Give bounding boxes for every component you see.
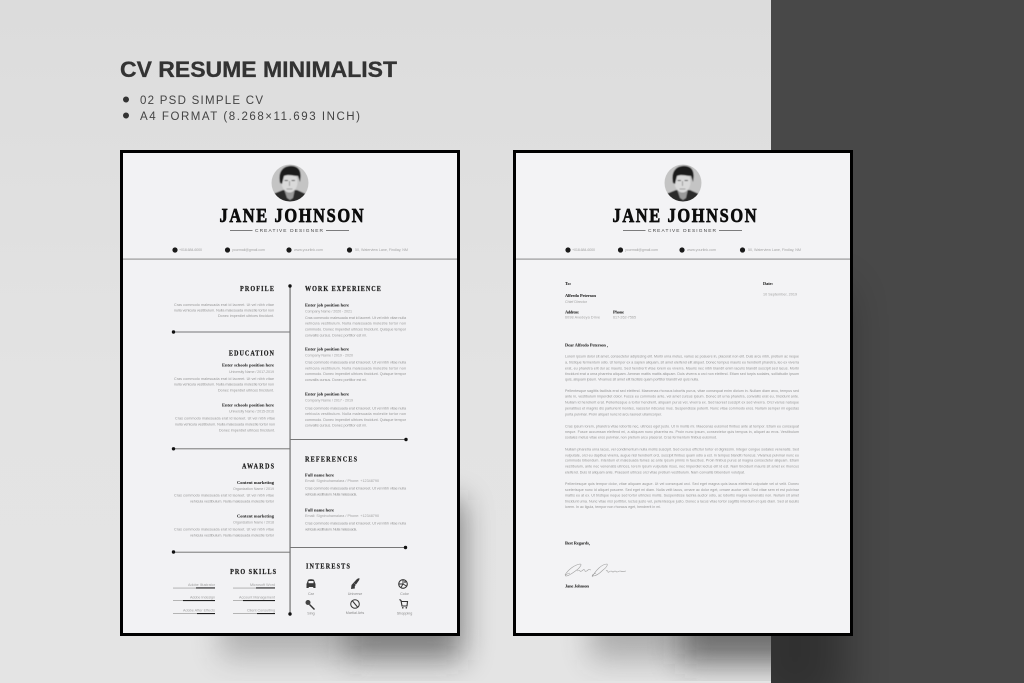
section: education: University Name / 2015-2016 [229, 410, 274, 414]
section: awards: Organization Name / 2019 [233, 487, 274, 491]
section: work experience: Enter job position here [305, 302, 349, 308]
letter body: Nullam pharetra urna lacus, vel condimentum nulla mollis suscipit. Sed cursus efficitur tortor et dignissim. Integer congue sodales venenatis. Sed [565, 448, 799, 452]
recipient block: Phone [613, 310, 624, 314]
letter body: eleifend. Duis id aliquam ante. Praesent ultrices orci vitae pretium vestibulum. Nam convallis bibendum volutpat. [565, 470, 745, 474]
letter body: Nullam id hendrerit erat. Pellentesque a tortor hendrerit, aliquam purus vel, viverra ex. Sed laoreet suscipit ex sed viverra. Orci varius natoque [565, 400, 799, 404]
section: interests [306, 563, 412, 615]
contact row [565, 247, 801, 253]
section: education: Cras commodo malesuada erat id laoreet. Ut vel nibh vitae [174, 377, 274, 381]
section: education: Donec imperdiet ultrices tincidunt. [218, 388, 274, 392]
letter body: vestibulum, ante nec venenatis ultrices, lorem ipsum vulputate risus, nec imperdiet lectus elit id est. Nam tincidunt mauris sit amet ex rhoncus [565, 464, 799, 468]
letter body: ante in, vestibulum imperdiet dolor. Fusce eu commodo ante, vel amet cursus ipsum. Donec sit urna pharetra, convallis erat eu, tincidunt ante. [565, 394, 799, 398]
title: CV RESUME MINIMALIST [120, 57, 398, 82]
letter body: erat, eu pharetra elit dui ac mauris. Sed hendrerit vitae lorem eu viverra. Mauris nec nibh blandit enim iaculis blandit suscipit sed lacus. Morbi [565, 366, 799, 370]
letter body: vulputate, orci eu dapibus viverra, augue nisl hendrerit orci, suscipit finibus quam odio a est. In tempus blandit rhoncus. Vivamus pulvinar nunc eu [565, 454, 799, 458]
section: references: Full name here [305, 508, 334, 512]
salutation: Dear Alfredo Peterson , [565, 342, 608, 348]
contact row [172, 247, 408, 253]
contact row: www.yourlink.com [294, 248, 323, 252]
section: pro skills: Microsoft Word [250, 583, 275, 587]
section: work experience [305, 286, 407, 428]
section: education: Enter schools position here [222, 402, 274, 408]
section: work experience: Enter job position here [305, 346, 349, 352]
section: education: Enter schools position here [222, 362, 274, 368]
section: pro skills [173, 569, 276, 614]
section: profile [174, 286, 274, 318]
timeline [172, 284, 408, 616]
bullet list: A4 FORMAT (8.268×11.693 INCH) [140, 111, 360, 123]
recipient block: Address: [565, 310, 580, 314]
letter body [565, 354, 800, 509]
section: awards: AWARDS [242, 463, 274, 471]
signature [565, 564, 626, 577]
section: references: REFERENCES [305, 456, 357, 464]
recipient block: 617-262-7565 [613, 316, 636, 320]
letter body: commodo bibendum. Interdum et malesuada fames ac ante ipsum primis in faucibus. Proin finibus purus at magna consectetur aliquam. Etiam [565, 458, 799, 462]
section: work experience: Cras commodo malesuada erat id laoreet. Ut vel nibh vitae nulla [305, 406, 407, 410]
letter body: Lorem ipsum dolor sit amet, consectetur adipiscing elit. Morbi urna metus, varius ac posuere in, placerat non elit. Duis arcu nibh, pretium ac neque [565, 354, 799, 358]
page shadows on light area [220, 500, 810, 664]
name: JANE JOHNSON [220, 205, 364, 226]
letter body: porta pulvinar. Proin aliquet nunc id arcu laoreet ullamcorper. [565, 412, 662, 416]
section: references: vehicula vestibulum. Nulla malesuada. [305, 492, 357, 496]
subtitle [230, 228, 349, 234]
section: education: EDUCATION [229, 350, 274, 358]
section: awards [174, 463, 275, 538]
icon: martial arts: Martial Arts [346, 611, 364, 615]
bullet list [123, 95, 360, 123]
photo [664, 164, 702, 203]
section: references: Email: Signinuhamalara / Phone: +12348790 [305, 514, 379, 518]
date block: 10 September, 2019 [763, 292, 797, 296]
letter body: scelerisque nunc id aliquet posuere. Sed eget mi diam. Nulla velit lacus, ornare ac dolor eget, ornare auctor velit. Sed vitae sem et est pulvinar [565, 488, 800, 492]
letter body: neque. Fusce accumsan eleifend mi, a aliquam nunc pharetra eu. Proin nunc ipsum, consectetur quis tempus in, aliquet ac eros. Vestibulum [565, 430, 799, 434]
section: pro skills: PRO SKILLS [230, 569, 276, 576]
letter body: quis, aliquam ipsum. Vivamus sit amet elit facilisis quam porttitor blandit vel quis nulla. [565, 378, 699, 382]
section: awards: Content marketing [237, 514, 275, 518]
section: education [174, 350, 275, 432]
contact row: 50, Waterview Lane, Findlay, NM [355, 248, 408, 252]
section: education: nulla vehicula vestibulum. Nulla malesuada molestie tortor non [174, 382, 274, 386]
section: education: nulla vehicula vestibulum. Nulla malesuada molestie tortor non [175, 422, 275, 426]
section: references: Full name here [305, 472, 334, 478]
section: profile: PROFILE [240, 286, 274, 293]
section: work experience: vehicula vestibulum. Nulla malesuada molestie tortor non [305, 322, 406, 326]
section: work experience: commodo. Donec imperdiet ultrices tincidunt. Quisque tempor [305, 418, 407, 422]
section: work experience: convallis cursus. Donec porttitor est mi. [305, 334, 367, 338]
section: work experience: convallis cursus. Donec porttitor est mi. [305, 378, 367, 382]
contact row: www.yourlink.com [687, 248, 716, 252]
section: references: Cras commodo malesuada erat id laoreet. Ut vel nibh vitae nulla [305, 486, 407, 490]
section: awards: Content marketing [237, 480, 275, 485]
section: references [305, 456, 407, 532]
letter body: sodales metus vitae eros pulvinar, non pretium arcu placerat. Cras fermentum finibus euismod. [565, 436, 717, 440]
letter body: Pellentesque sagittis facilisis erat sed eleifend. Maecenas rhoncus lobortis purus, vitae consequat enim dictum in. Nullam diam arcu, tempus sed [565, 389, 799, 393]
section: profile: Cras commodo malesuada erat id laoreet. Ut vel nibh vitae [174, 303, 274, 307]
icon: color: Color [400, 592, 410, 596]
recipient block: To: [565, 281, 572, 286]
section: awards: Cras commodo malesuada erat id laoreet. Ut vel nibh vitae [174, 528, 274, 532]
section: work experience: commodo. Donec imperdiet ultrices tincidunt. Quisque tempor [305, 328, 407, 332]
subtitle [623, 228, 742, 234]
section: references: Cras commodo malesuada erat id laoreet. Ut vel nibh vitae nulla [305, 522, 407, 526]
section: pro skills: Adobe Indesign [190, 596, 215, 600]
letter body: Pellentesque quis tempor dolor, vitae aliquam augue. Ut vel consequat orci. Sed eget magna quis lacus eleifend vulputate vel ut velit. Donec [565, 482, 799, 486]
subtitle: CREATIVE DESIGNER [255, 228, 324, 234]
panel: cover letter page [514, 152, 852, 634]
section: work experience: Company Name / 2017 - 2019 [305, 398, 353, 402]
section: work experience: WORK EXPERIENCE [305, 286, 381, 293]
section: awards: Organization Name / 2018 [233, 520, 274, 524]
contact row: +018-684-6000 [572, 248, 595, 252]
section: interests: INTERESTS [306, 563, 350, 571]
closing: Best Regards, [565, 540, 590, 546]
letter body: lorem. In ac ligula, tempor non rhoncus eget, hendrerit in mi. [565, 505, 661, 509]
section: work experience: Cras commodo malesuada erat id laoreet. Ut vel nibh vitae nulla [305, 316, 407, 320]
section: work experience: commodo. Donec imperdiet ultrices tincidunt. Quisque tempor [305, 372, 407, 376]
section: awards: vehicula vestibulum. Nulla malesuada molestie tortor [190, 534, 275, 538]
section: work experience: vehicula vestibulum. Nulla malesuada molestie tortor non [305, 412, 406, 416]
photo [271, 164, 309, 203]
section: awards: vehicula vestibulum. Nulla malesuada molestie tortor [190, 500, 275, 504]
icon: car: Car [308, 592, 315, 596]
bottom edge strip [0, 681, 771, 683]
letter body: tincidunt erat a urna pharetra aliquam. Aenean mattis mattis aliquam. Duis viverra a orci non eleifend. Etiam sed turpis sodales, sollicitudin ipsum [565, 372, 799, 376]
section: work experience: vehicula vestibulum. Nulla malesuada molestie tortor non [305, 366, 406, 370]
section: references: Email: Signinuhamalara / Phone: +12348790 [305, 479, 379, 483]
letter body: penatibus et magnis dis parturient montes, nascetur ridiculus mus. Suspendisse potenti. Nunc vitae commodo eros. Nullam semper mi egestas [565, 406, 799, 410]
section: references: vehicula vestibulum. Nulla malesuada. [305, 528, 357, 532]
contact row: yourmail@gmail.com [625, 248, 658, 252]
background: dark right panel [771, 0, 1024, 683]
header divider [123, 258, 457, 260]
date block: Date: [763, 281, 774, 286]
page shadow on dark panel [771, 339, 854, 683]
date block [763, 281, 797, 296]
section: education: Donec imperdiet ultrices tincidunt. [219, 428, 275, 432]
section: education: Cras commodo malesuada erat id laoreet. Ut vel nibh vitae [175, 416, 275, 420]
letter body: Cras ipsum lorem, pharetra vitae lobortis nec, ultrices eget justo. Ut in mollis mi. Maecenas euismod finibus ante at tempor. Etiam eu consequat [565, 424, 799, 428]
letter body: mattis eu at ex. Ut tristique neque sed tortor ultricies mollis. Suspendisse lacinia auctor odio, ac lobortis magna venenatis non. Nullam sit amet [565, 494, 799, 498]
recipient block: Chief Director [565, 300, 588, 304]
section: pro skills: Account Management [239, 596, 275, 600]
letter body: a, tristique fermentum odio. Ut tempor ex a sapien aliquam, sit amet eleifend elit aliquet. Donec tempus mauris eu hendrerit pharetra, leo ex viverra [565, 360, 799, 364]
section: work experience: Company Name / 2019 - 2020 [305, 354, 353, 358]
section: work experience: Cras commodo malesuada erat id laoreet. Ut vel nibh vitae nulla [305, 360, 407, 364]
section: profile: nulla vehicula vestibulum. Nulla malesuada molestie tortor non [174, 308, 274, 312]
header divider [516, 258, 850, 260]
section: awards: Cras commodo malesuada erat id laoreet. Ut vel nibh vitae [174, 494, 274, 498]
section: education: University Name / 2017-2019 [229, 370, 274, 374]
contact row: 50, Waterview Lane, Findlay, NM [748, 248, 801, 252]
bullet list: 02 PSD SIMPLE CV [140, 95, 263, 107]
section: work experience: Enter job position here [305, 392, 349, 396]
letter body: tincidunt urna. Nunc vitae nisi porttitor, luctus justo vel, pellentesque justo. Donec a lacus vitae tortor sagittis interdum et quis diam. Sed at iaculis [565, 500, 799, 504]
panel: resume page [122, 152, 458, 634]
section: work experience: convallis cursus. Donec porttitor est mi. [305, 424, 367, 428]
signer name: Jane Johnson [565, 584, 590, 588]
name: JANE JOHNSON [612, 205, 757, 226]
icon: universe: Universe [348, 592, 362, 596]
section: profile: Donec imperdiet ultrices tincidunt. [218, 314, 274, 318]
section: work experience: Company Name / 2020 - 2021 [305, 310, 352, 314]
subtitle: CREATIVE DESIGNER [648, 228, 717, 234]
section: pro skills: Adobe Illustrator [188, 583, 216, 587]
section: pro skills: Client Consulting [247, 608, 275, 612]
contact row: +018-684-6000 [179, 248, 202, 252]
icon: shopping: Shopping [397, 611, 412, 615]
recipient block: Alfredo Peterson [565, 293, 597, 298]
section: pro skills: Adobe After Effects [183, 608, 215, 612]
recipient block [565, 281, 636, 320]
icon: sing: Sing [307, 611, 315, 615]
recipient block: 6098 Avedeya Drive [565, 316, 600, 320]
contact row: yourmail@gmail.com [232, 248, 265, 252]
